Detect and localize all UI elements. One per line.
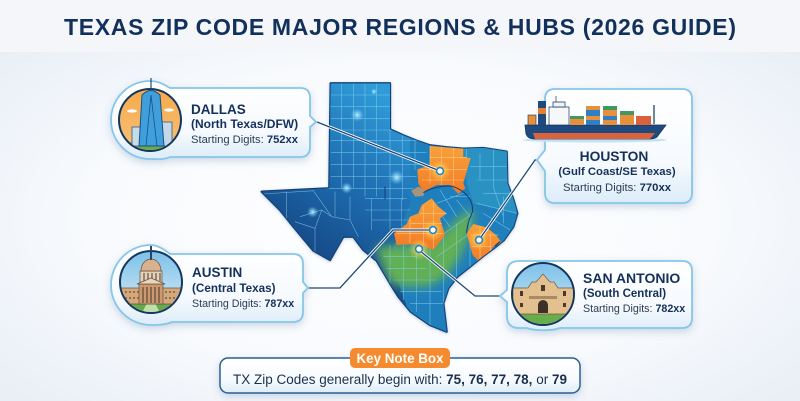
Austin text: AUSTIN [192, 265, 242, 280]
Texas map [257, 80, 523, 337]
county grid [263, 83, 517, 325]
Dallas text: DALLAS [191, 102, 246, 117]
San Antonio text: SAN ANTONIO [583, 270, 680, 286]
glow points [307, 88, 489, 260]
key note text: TX Zip Codes generally begin with: 75, 76, 77, 78, or 79 [233, 372, 567, 387]
icon: Alamo [512, 263, 574, 326]
title banner [0, 0, 800, 52]
river borders [385, 186, 473, 233]
DFW orange region [411, 146, 471, 197]
connector: Austin [306, 227, 436, 288]
Austin text: (Central Texas) [192, 282, 276, 295]
Houston text [558, 149, 676, 194]
title banner: TEXAS ZIP CODE MAJOR REGIONS & HUBS (2026 GUIDE) [64, 14, 736, 40]
callout: Austin [111, 245, 308, 325]
key note badge [350, 348, 450, 368]
central orange region [394, 198, 447, 250]
connector: Houston [476, 160, 543, 243]
Houston text: HOUSTON [580, 149, 648, 164]
Dallas text [191, 102, 299, 146]
San Antonio text: Starting Digits: 782xx [583, 303, 685, 315]
connector: San Antonio [416, 246, 501, 296]
Houston text: (Gulf Coast/SE Texas) [558, 166, 676, 178]
callout: Dallas [111, 78, 316, 159]
San Antonio text [583, 270, 685, 315]
icon: cargo ship [523, 96, 667, 142]
Austin text [192, 265, 294, 310]
Dallas text: (North Texas/DFW) [191, 117, 298, 131]
Houston orange region [467, 224, 502, 263]
Houston text: Starting Digits: 770xx [563, 182, 672, 194]
key note box [220, 348, 580, 393]
callout: Houston [523, 89, 692, 203]
key note badge: Key Note Box [356, 351, 444, 366]
Dallas text: Starting Digits: 752xx [191, 134, 299, 146]
callout: San Antonio [500, 261, 692, 330]
connector: Dallas [317, 122, 443, 174]
icon: Dallas skyscraper [118, 78, 182, 154]
icon: Austin capitol [120, 246, 182, 315]
Austin text: Starting Digits: 787xx [192, 298, 294, 310]
San Antonio text: (South Central) [583, 288, 666, 300]
